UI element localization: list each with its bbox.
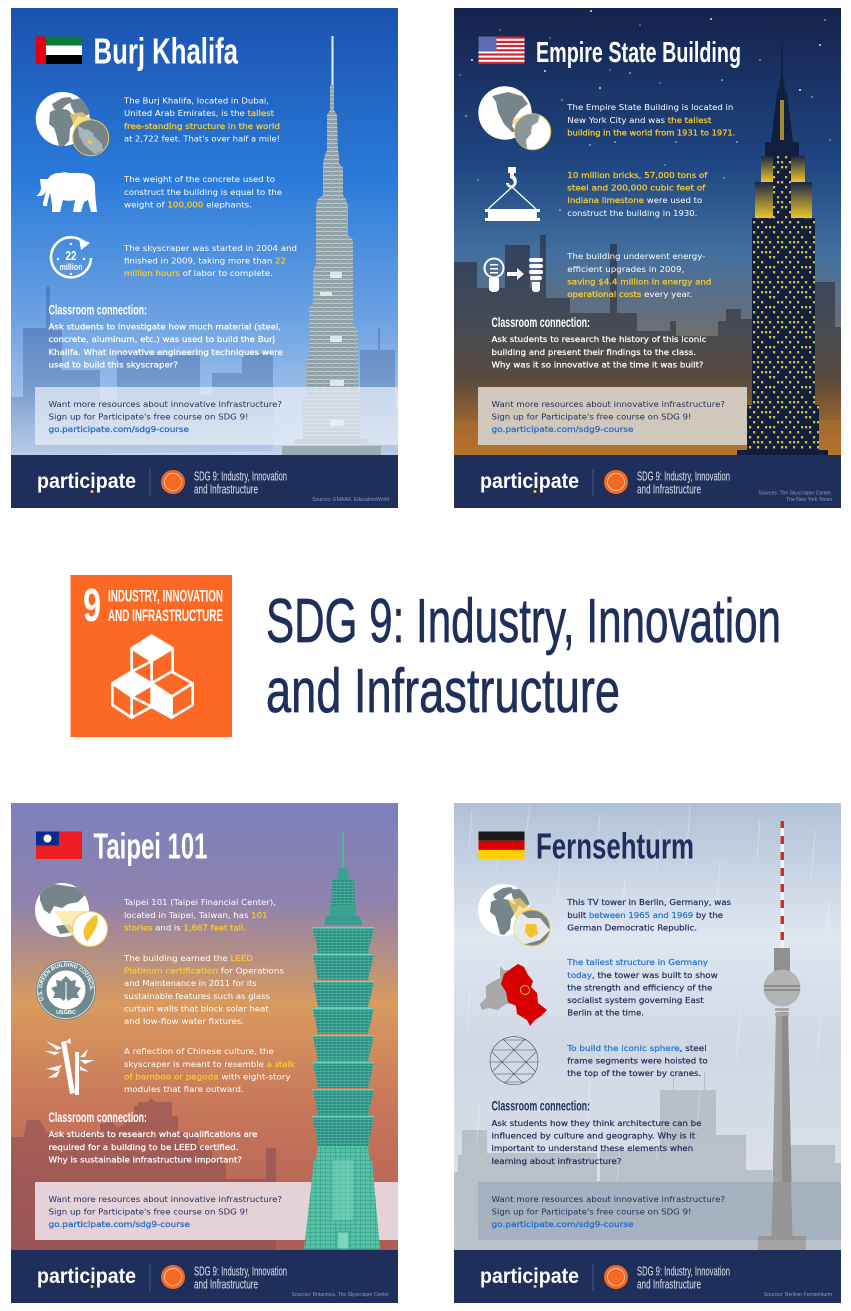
tower shaft over box <box>758 1182 806 1240</box>
icon: clock 22 million <box>51 237 91 277</box>
text: location: built between 1965 and 1969 by the <box>567 911 723 920</box>
classroom connection: Khalifa. What innovative engineering techniques were <box>48 348 283 357</box>
tower: Burj Khalifa <box>282 36 381 455</box>
rain <box>467 805 830 1180</box>
text: location: German Democratic Republic. <box>567 924 697 932</box>
title: Fernsehturm <box>536 826 694 866</box>
text: bamboo: A reflection of Chinese culture, the <box>124 1047 274 1056</box>
text: labor <box>123 244 297 278</box>
text: tallest: The tallest structure in Germany <box>566 958 709 967</box>
icon: elephant <box>36 172 97 212</box>
call-to-action box <box>35 387 398 445</box>
heading <box>266 587 781 726</box>
text: upgrades: efficient upgrades in 2009, <box>567 265 684 274</box>
footer <box>11 455 398 508</box>
stars <box>459 10 831 211</box>
text: LEED: sustainable features such as glass <box>124 992 270 1001</box>
title: Taipei 101 <box>94 826 208 866</box>
footer <box>454 1250 841 1303</box>
call-to-action box: go.participate.com/sdg9-course <box>48 1220 190 1229</box>
SDG 9 badge: 9 <box>83 579 101 631</box>
icon: clock 22 million: 22 <box>66 248 76 263</box>
classroom connection: important to understand these elements when <box>492 1144 693 1153</box>
text: materials: construct the building in 1930. <box>567 209 697 218</box>
city skyline <box>11 1098 276 1268</box>
classroom connection: Classroom connection: <box>492 1098 590 1114</box>
icon: light bulb to CFL <box>484 258 543 292</box>
call-to-action box: go.participate.com/sdg9-course <box>492 425 634 434</box>
call-to-action box: go.participate.com/sdg9-course <box>492 1220 634 1229</box>
classroom connection: Classroom connection: <box>48 1109 147 1125</box>
text: location: United Arab Emirates, is the tallest <box>124 109 274 118</box>
heading: and Infrastructure <box>266 657 620 726</box>
flag: Germany <box>478 832 524 859</box>
footer: and Infrastructure <box>194 1276 258 1292</box>
text: bamboo: skyscraper is meant to resemble a stalk <box>124 1060 296 1069</box>
classroom connection: influenced by culture and geography. Why is it <box>492 1132 695 1140</box>
classroom connection <box>492 1098 702 1166</box>
footer: SDG 9: Industry, Innovation <box>637 1264 730 1278</box>
footer: SDG 9: Industry, Innovation <box>194 468 287 484</box>
text: concrete: construct the building is equal to the <box>124 188 282 197</box>
text: tallest: socialist system governing East <box>567 996 704 1005</box>
text: LEED: and Maintenance in 2011 for its <box>124 979 257 988</box>
panel: Fernsehturm <box>454 803 841 1303</box>
text: sphere: the top of the tower by cranes. <box>567 1069 701 1078</box>
footer: Sources: EMAAR, EducationWorld <box>312 497 389 503</box>
text: location <box>123 898 276 932</box>
text: sphere: To build the iconic sphere , steel <box>566 1044 707 1053</box>
icon: USGBC seal <box>36 960 96 1020</box>
footer: and Infrastructure <box>637 482 701 496</box>
icon: Berlin map <box>480 964 547 1026</box>
text: location: stories and is 1,667 feet tall. <box>124 924 246 932</box>
footer: participate <box>37 1265 136 1288</box>
classroom connection <box>48 302 283 370</box>
city skyline <box>454 1072 841 1250</box>
classroom connection <box>492 314 706 370</box>
call-to-action box <box>478 387 747 445</box>
icon: USGBC seal: U.S. GREEN BUILDING COUNCIL <box>38 962 94 1001</box>
text: bamboo <box>124 1047 296 1094</box>
text: LEED <box>123 954 284 1026</box>
icon: globe <box>478 86 551 156</box>
SDG 9 badge: AND INFRASTRUCTURE <box>108 607 223 625</box>
footer: SDG 9: Industry, Innovation <box>637 468 730 484</box>
call-to-action box: Sign up for Participate's free course on SDG 9! <box>48 412 248 422</box>
footer: SDG 9: Industry, Innovation <box>194 1264 287 1278</box>
text: location: located in Taipei, Taiwan, has 101 <box>124 911 268 920</box>
call-to-action box: Sign up for Participate's free course on SDG 9! <box>492 1208 692 1216</box>
text: upgrades: operational costs every year. <box>567 290 692 299</box>
classroom connection: required for a building to be LEED certified. <box>48 1143 238 1152</box>
text: location: free-standing structure in the world <box>124 122 280 131</box>
footer <box>454 455 841 508</box>
classroom connection: Ask students to investigate how much material (steel, <box>48 322 281 332</box>
text: upgrades <box>566 252 711 299</box>
icon: hook and beam <box>485 167 540 221</box>
icon: globe <box>35 883 108 946</box>
classroom connection: Why is sustainable infrastructure important? <box>48 1156 242 1164</box>
icon: USGBC seal: USGBC <box>56 1010 76 1016</box>
text: location: Taipei 101 (Taipei Financial Center), <box>123 898 276 907</box>
text: bamboo: modules that flare outward. <box>124 1085 244 1094</box>
panel: Taipei 101 <box>11 803 398 1303</box>
call-to-action box <box>478 1182 841 1240</box>
footer: and Infrastructure <box>194 482 258 496</box>
footer <box>11 1250 398 1303</box>
panel: Empire State Building <box>454 8 841 508</box>
call-to-action box: Want more resources about innovative infrastructure? <box>492 400 725 409</box>
text: materials <box>567 171 708 218</box>
tower: Fernsehturm <box>758 821 806 1250</box>
call-to-action box: Sign up for Participate's free course on SDG 9! <box>48 1208 248 1216</box>
text: location <box>566 103 735 138</box>
text: materials: Indiana limestone were used to <box>567 196 703 205</box>
tower: Empire State Building <box>737 25 828 455</box>
tower base over box <box>304 1160 380 1249</box>
icon: globe <box>478 884 550 946</box>
text: upgrades: saving $4.4 million in energy and <box>567 278 711 286</box>
text: LEED: curtain walls that block solar heat <box>124 1004 269 1014</box>
flag: UAE <box>36 36 82 64</box>
text: location: New York City and was the tallest <box>567 116 711 125</box>
text: location <box>566 898 731 932</box>
flag: USA <box>478 36 524 64</box>
text: concrete <box>123 175 282 210</box>
text: tallest: today , the tower was built to show <box>567 971 718 980</box>
text: tallest: Berlin at the time. <box>567 1008 644 1018</box>
text: sphere: frame segments were hoisted to <box>567 1056 708 1066</box>
text: tallest: the strength and efficiency of the <box>567 984 713 992</box>
panel: Burj Khalifa <box>11 8 398 508</box>
text: materials: 10 million bricks, 57,000 tons of <box>567 171 708 180</box>
call-to-action box: Want more resources about innovative infrastructure? <box>492 1195 725 1204</box>
icon: globe <box>36 92 109 156</box>
footer: participate <box>480 1265 579 1288</box>
flag: Taiwan <box>36 832 82 859</box>
classroom connection: learning about infrastructure? <box>492 1157 622 1166</box>
classroom connection: Classroom connection: <box>492 314 590 330</box>
classroom connection: Ask students to research the history of this iconic <box>492 335 706 344</box>
text: location: This TV tower in Berlin, Germany, was <box>566 898 731 907</box>
city skyline <box>11 287 398 455</box>
call-to-action box: Want more resources about innovative infrastructure? <box>48 400 282 409</box>
text: location: The Burj Khalifa, located in Dubai, <box>123 96 269 106</box>
text: tallest <box>566 958 718 1018</box>
classroom connection: concrete, aluminum, etc.) was used to build the Burj <box>48 335 275 344</box>
text: labor: finished in 2009, taking more than 22 <box>124 256 286 266</box>
icon: geodesic sphere <box>490 1034 538 1086</box>
text: labor: million hours of labor to complete. <box>124 269 273 278</box>
SDG 9 badge <box>70 575 232 737</box>
icon: bamboo <box>45 1038 94 1095</box>
footer: Sources: The Skyscraper Center, <box>758 490 832 496</box>
classroom connection: Ask students how they think architecture can be <box>492 1119 702 1128</box>
text: bamboo: of bamboo or pagoda with eight-story <box>124 1072 291 1082</box>
footer: Sources: Berliner Fernsehturm <box>764 1292 832 1298</box>
footer: and Infrastructure <box>637 1276 701 1292</box>
call-to-action box: Want more resources about innovative infrastructure? <box>48 1195 282 1204</box>
text: location: The Empire State Building is located in <box>566 103 733 112</box>
classroom connection: used to build this skyscraper? <box>48 360 178 370</box>
text: sphere <box>566 1044 708 1078</box>
text: location: building in the world from 1931 to 1971. <box>567 128 735 138</box>
text: LEED: Platinum certification for Operations <box>124 966 284 976</box>
classroom connection: building and present their findings to the class. <box>492 348 696 357</box>
classroom connection <box>48 1109 258 1164</box>
footer: The New York Times <box>786 497 832 503</box>
classroom connection: Why was it so innovative at the time it was built? <box>492 360 704 370</box>
city skyline <box>454 235 841 439</box>
call-to-action box: go.participate.com/sdg9-course <box>48 425 189 434</box>
text: upgrades: The building underwent energy- <box>566 252 706 261</box>
text: materials: steel and 200,000 cubic feet of <box>567 184 706 192</box>
classroom connection: Classroom connection: <box>48 302 147 318</box>
tower: Taipei 101 <box>304 832 380 1249</box>
icon: clock 22 million: million <box>60 262 83 273</box>
classroom connection: Ask students to research what qualifications are <box>48 1130 258 1139</box>
footer: Sources: Britannica, The Skyscraper Center <box>292 1292 389 1298</box>
title: Burj Khalifa <box>94 30 239 72</box>
text: concrete: weight of 100,000 elephants. <box>124 200 252 210</box>
text: location <box>123 96 280 144</box>
icon: cubes <box>112 636 193 718</box>
text: concrete: The weight of the concrete used to <box>123 175 275 184</box>
call-to-action box: Sign up for Participate's free course on SDG 9! <box>492 412 692 422</box>
text: location: at 2,722 feet. That's over half a mile! <box>124 134 280 144</box>
call-to-action box <box>35 1182 398 1240</box>
SDG 9 badge: INDUSTRY, INNOVATION <box>108 588 223 606</box>
footer: participate <box>37 470 136 493</box>
text: LEED: The building earned the LEED <box>123 954 253 963</box>
text: LEED: and low-flow water fixtures. <box>124 1017 244 1026</box>
text: labor: The skyscraper was started in 2004 and <box>123 244 297 253</box>
title: Empire State Building <box>536 37 741 69</box>
footer: participate <box>480 470 579 493</box>
